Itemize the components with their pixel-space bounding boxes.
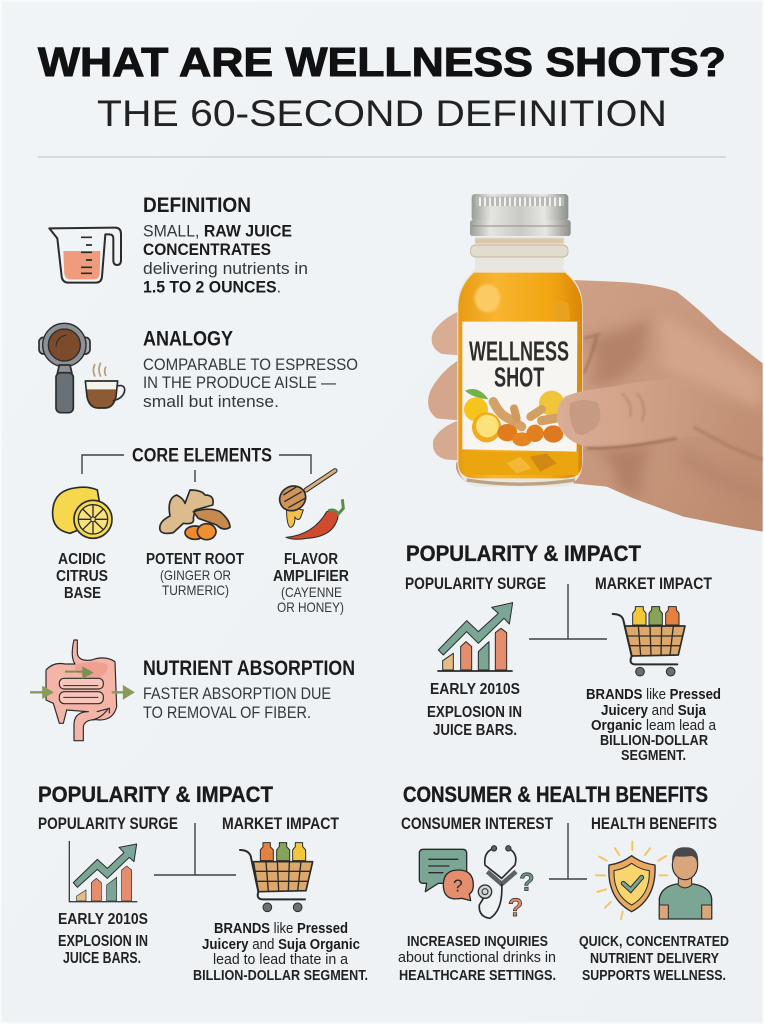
- text: nutrient absorption body: TO REMOVAL OF FIBER.: [143, 704, 311, 722]
- icon: speech bubbles and stethoscope: ?: [508, 895, 523, 922]
- text: consumer interest: HEALTHCARE SETTINGS.: [399, 968, 556, 984]
- panel: analogy: [39, 323, 358, 413]
- text: definition body: CONCENTRATES: [143, 241, 271, 259]
- text: nutrient absorption body: FASTER ABSORPTION DUE: [143, 685, 331, 703]
- subheading: health benefits: HEALTH BENEFITS: [591, 814, 717, 833]
- panel: nutrient absorption: [30, 640, 355, 741]
- heading: POPULARITY & IMPACT: [406, 541, 642, 566]
- text: health benefits: [579, 934, 729, 984]
- text: nutrient absorption body: [143, 685, 331, 722]
- hand: thumb: [557, 378, 763, 460]
- item: acidic citrus base: BASE: [64, 585, 101, 602]
- text: health benefits: QUICK, CONCENTRATED: [579, 934, 729, 950]
- text: popularity surge: EARLY 2010S: [430, 681, 520, 698]
- panel: popularity and impact (bottom left): [38, 782, 368, 984]
- text: analogy body: small but intense.: [143, 393, 279, 411]
- text: market impact: BRANDS like Pressed: [586, 687, 721, 703]
- item: acidic citrus base: ACIDIC: [58, 551, 106, 568]
- subheading: market impact: MARKET IMPACT: [222, 814, 340, 833]
- text: consumer interest: about functional drinks in: [398, 950, 556, 966]
- text: market impact: Juicery and Suja Organic: [202, 937, 360, 953]
- panel: consumer and health benefits: [398, 782, 729, 984]
- text: definition body: 1.5 TO 2 OUNCES.: [143, 278, 281, 296]
- hand: palm: [573, 280, 763, 532]
- icon: shopping cart with bottles: [613, 607, 685, 676]
- icon: speech bubbles and stethoscope: ?: [453, 875, 463, 895]
- text: market impact: Juicery and Suja: [601, 703, 707, 719]
- item: potent root: TURMERIC): [162, 582, 229, 598]
- panel: definition: [49, 194, 308, 296]
- icon: rising bar chart: [437, 603, 513, 671]
- heading: CONSUMER & HEALTH BENEFITS: [403, 782, 708, 807]
- item: potent root: POTENT ROOT: [146, 551, 244, 568]
- item: flavor amplifier: (CAYENNE: [281, 584, 342, 600]
- text: market impact: BILLION-DOLLAR SEGMENT.: [193, 968, 368, 984]
- heading: core elements: CORE ELEMENTS: [132, 446, 272, 466]
- icon: honey dipper and chili: [275, 471, 343, 539]
- item: flavor amplifier: [273, 551, 349, 615]
- text: market impact: BILLION-DOLLAR: [600, 733, 708, 749]
- icon: espresso portafilter and cup: [39, 323, 125, 413]
- text: popularity surge: [58, 911, 148, 967]
- item: flavor amplifier: FLAVOR: [284, 551, 338, 568]
- heading: nutrient absorption: NUTRIENT ABSORPTION: [143, 657, 355, 680]
- subheading: popularity surge: POPULARITY SURGE: [405, 574, 546, 593]
- icon: speech bubbles and stethoscope: [419, 846, 534, 922]
- item: acidic citrus base: CITRUS: [56, 568, 108, 585]
- icon: rising bar chart with axes: [69, 841, 137, 902]
- bottle label: [462, 322, 577, 452]
- panel: core elements: [53, 446, 349, 615]
- illustration: hand holding wellness shot bottle: [428, 194, 763, 532]
- text: health benefits: SUPPORTS WELLNESS.: [582, 968, 726, 984]
- text: popularity surge: JUICE BARS.: [63, 950, 141, 967]
- item: flavor amplifier: AMPLIFIER: [273, 568, 349, 585]
- text: analogy body: IN THE PRODUCE AISLE —: [143, 374, 336, 392]
- text: popularity surge: [427, 681, 522, 739]
- text: health benefits: NUTRIENT DELIVERY: [590, 951, 719, 967]
- text: consumer interest: INCREASED INQUIRIES: [407, 934, 548, 950]
- text: popularity surge: EXPLOSION IN: [58, 933, 148, 950]
- text: market impact: [586, 687, 721, 764]
- item: potent root: [146, 551, 244, 598]
- text: analogy body: COMPARABLE TO ESPRESSO: [143, 356, 358, 374]
- item: potent root: (GINGER OR: [160, 567, 231, 583]
- text: market impact: BRANDS like Pressed: [214, 921, 348, 937]
- item: acidic citrus base: [56, 551, 108, 602]
- bottle label: SHOT: [494, 362, 544, 393]
- text: consumer interest: [398, 934, 556, 984]
- icon: shopping cart with bottles: [240, 843, 313, 912]
- bottle cap: [470, 194, 571, 236]
- text: definition body: [143, 222, 308, 296]
- subheading: consumer interest: CONSUMER INTEREST: [401, 814, 553, 833]
- heading: POPULARITY & IMPACT: [38, 782, 274, 807]
- heading: definition: DEFINITION: [143, 194, 251, 217]
- text: market impact: lead to lead thate in a: [213, 952, 349, 968]
- text: market impact: SEGMENT.: [621, 748, 686, 764]
- text: popularity surge: JUICE BARS.: [433, 722, 517, 739]
- text: analogy body: [143, 356, 358, 411]
- text: market impact: Organic leam lead a: [591, 718, 717, 734]
- label artwork: citrus and ginger: [464, 389, 564, 446]
- text: popularity surge: EXPLOSION IN: [427, 704, 522, 721]
- text: definition body: SMALL, RAW JUICE: [143, 222, 292, 240]
- item: flavor amplifier: OR HONEY): [277, 599, 344, 615]
- text: market impact: [193, 921, 368, 984]
- bottle: [457, 237, 583, 487]
- title: WHAT ARE WELLNESS SHOTS?: [38, 39, 726, 85]
- panel: popularity and impact (right): [405, 541, 721, 764]
- bottle label: WELLNESS: [469, 336, 569, 367]
- subheading: popularity surge: POPULARITY SURGE: [38, 814, 178, 833]
- icon: measuring cup: [49, 228, 121, 283]
- subheading: market impact: MARKET IMPACT: [595, 574, 713, 593]
- subtitle: THE 60-SECOND DEFINITION: [97, 93, 667, 134]
- icon: digestive system with arrows: [30, 640, 133, 741]
- icon: speech bubbles and stethoscope: ?: [519, 870, 534, 897]
- heading: analogy: ANALOGY: [143, 328, 233, 350]
- icon: lemon: [53, 487, 112, 538]
- hand: fingers behind bottle: [428, 311, 477, 482]
- text: definition body: delivering nutrients in: [143, 260, 308, 278]
- icon: ginger and turmeric: [160, 490, 230, 540]
- icon: shield and person: [596, 842, 712, 919]
- text: popularity surge: EARLY 2010S: [58, 911, 148, 928]
